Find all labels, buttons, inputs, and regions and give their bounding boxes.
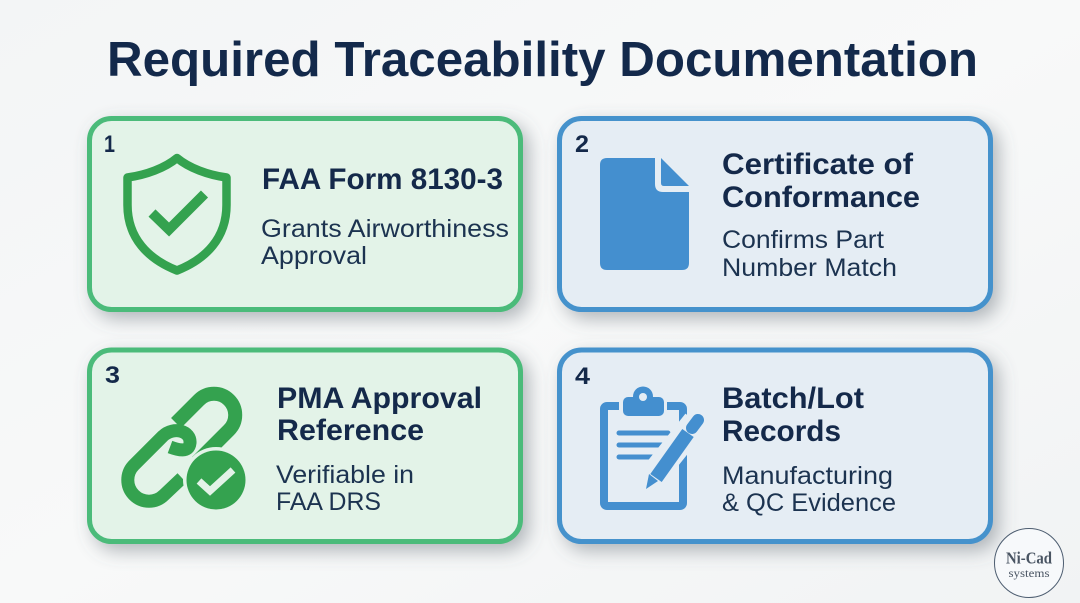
description: Verifiable in [276, 461, 414, 489]
panel: PMA Approval Reference [90, 350, 520, 542]
logo: Ni-Cad systems: systems [1008, 566, 1050, 580]
panel: FAA Form 8130-3 [90, 118, 520, 310]
description [722, 462, 896, 517]
logo: Ni-Cad systems [994, 528, 1064, 598]
description: Confirms Part [722, 226, 884, 254]
description: Number Match [722, 254, 897, 282]
number 4: 4 [575, 363, 591, 390]
description: Manufacturing [722, 462, 893, 490]
heading: Certificate of [722, 148, 914, 181]
heading: Conformance [722, 181, 920, 214]
heading [277, 382, 482, 447]
heading: Records [722, 415, 841, 448]
panel: Certificate of Conformance [560, 118, 990, 310]
heading: PMA Approval [277, 382, 482, 415]
description: Approval [261, 242, 367, 270]
heading: Batch/Lot [722, 382, 864, 415]
icon: chain link with check [128, 394, 249, 513]
description [276, 461, 414, 516]
description [261, 215, 509, 270]
icon: shield with check [128, 158, 226, 270]
number 2: 2 [575, 131, 589, 158]
heading: Reference [277, 414, 424, 447]
number 3: 3 [105, 362, 120, 389]
description [722, 226, 897, 282]
heading [722, 382, 864, 448]
logo: Ni-Cad systems: Ni-Cad [1006, 548, 1052, 568]
description: & QC Evidence [722, 489, 896, 517]
number 1: 1 [104, 131, 115, 158]
heading: FAA Form 8130-3 [262, 163, 503, 196]
icon: clipboard with pencil [604, 386, 698, 506]
description: Grants Airworthiness [261, 215, 509, 243]
heading [722, 148, 920, 214]
icon: document [600, 158, 689, 270]
panel: Batch/Lot Records [560, 350, 990, 542]
title: Required Traceability Documentation [107, 33, 978, 87]
description: FAA DRS [276, 488, 381, 516]
